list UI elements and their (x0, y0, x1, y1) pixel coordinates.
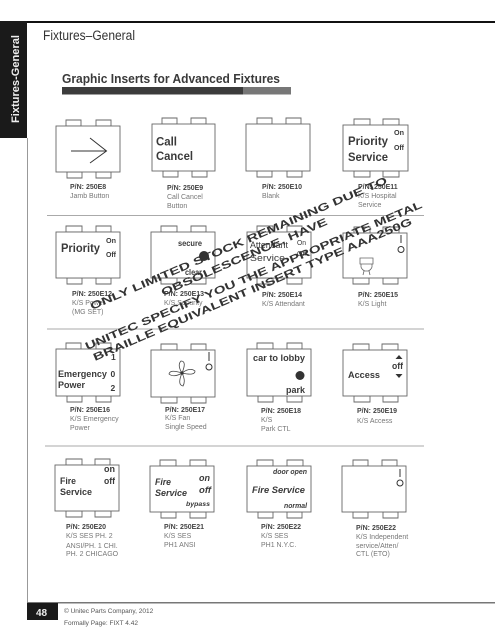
label: 250E11: Service (358, 202, 381, 209)
label: 250E17: Single Speed (165, 424, 207, 431)
label: 250E17 (165, 407, 207, 431)
footer text: Formally Page: FIXT 4.42 (64, 620, 138, 627)
button: emergency power: Power (58, 380, 85, 391)
button: light (343, 227, 407, 284)
button: priority: Priority (61, 241, 100, 255)
page number: 48 (36, 608, 48, 619)
label: 250E22 independent: service/Atten/ (356, 543, 398, 550)
section heading (62, 72, 291, 94)
button: priority service: Priority (348, 134, 388, 148)
label: 250E17: P/N: 250E17 (165, 407, 205, 414)
label: 250E14: K/S Attendant (262, 301, 305, 308)
label: 250E20: ANSI/PH. 1 CHI. (66, 543, 118, 550)
label: 250E9: Button (167, 203, 187, 210)
label: 250E20: P/N: 250E20 (66, 524, 106, 531)
button: priority service: On (394, 128, 404, 137)
button: emergency power (56, 343, 120, 402)
label: 250E22 independent: P/N: 250E22 (356, 525, 396, 532)
button: door open fire service: door open (273, 469, 307, 476)
label: 250E14: P/N: 250E14 (262, 292, 302, 299)
label: 250E16: P/N: 250E16 (70, 407, 110, 414)
label: 250E18 (261, 408, 301, 433)
button: priority: On (106, 236, 116, 245)
button: car to lobby: park (286, 385, 306, 395)
label: 250E21 (164, 524, 204, 549)
button: attendant service: On (297, 240, 306, 247)
button: priority (56, 226, 120, 284)
obsolescence notice overlay: UNITEC SPECIFY YOU THE APPROPRIATE METAL (83, 199, 425, 353)
label: 250E22 fire service (261, 524, 301, 549)
label: 250E11: P/N: 250E11 (358, 184, 398, 191)
button: emergency power: 1 (111, 352, 116, 362)
button: jamb arrow (56, 120, 120, 178)
label: 250E22 independent (356, 525, 408, 558)
button: access: Access (348, 370, 380, 381)
label: 250E21: P/N: 250E21 (164, 524, 204, 531)
label: 250E13: K/S Security (164, 300, 203, 307)
button: car to lobby: car to lobby (253, 353, 305, 363)
obsolescence notice overlay: BRAILLE EQUIVALENT INSERT TYPE AAA250G (91, 216, 414, 364)
button: priority service: Off (394, 143, 404, 152)
label: 250E12 (72, 291, 112, 316)
label: 250E11: K/S Hospital (358, 193, 397, 200)
button: attendant service: Service (250, 253, 285, 264)
page left rule (27, 138, 28, 603)
button: secure: secure (178, 239, 203, 248)
button: car to lobby (247, 343, 311, 402)
button: call cancel: Cancel (156, 149, 193, 163)
obsolescence notice overlay: ONLY LIMITED STOCK REMAINING DUE TO (88, 175, 389, 313)
button: priority service: Service (348, 150, 388, 164)
label: 250E12: K/S Power (72, 300, 106, 307)
label: 250E21: K/S SES (164, 533, 192, 540)
button: secure: clear (185, 268, 202, 277)
button: fire service bypass (150, 460, 214, 518)
label: 250E18: P/N: 250E18 (261, 408, 301, 415)
label: 250E16: K/S Emergency (70, 416, 119, 423)
footer text (64, 607, 154, 627)
label: 250E10: Blank (262, 193, 280, 200)
button: door open fire service (247, 460, 311, 518)
label: 250E21: PH1 ANSI (164, 542, 196, 549)
button: access (343, 344, 407, 402)
button: call cancel: Call (156, 134, 177, 148)
obsolescence notice overlay: OBSOLESCENCE, HAVE (159, 216, 329, 299)
page number (27, 603, 58, 620)
button: fire service: off (104, 476, 116, 486)
button: priority service (343, 119, 408, 177)
label: 250E19: K/S Access (357, 418, 393, 425)
label: 250E19: P/N: 250E19 (357, 408, 397, 415)
label: 250E17: K/S Fan (165, 415, 190, 422)
button: fire service bypass: off (199, 485, 212, 495)
button: fire service: on (104, 464, 115, 474)
label: 250E13 (164, 291, 204, 307)
button: fire service: Fire (60, 476, 76, 487)
label: 250E9: Call Cancel (167, 194, 203, 201)
row separators (45, 215, 424, 446)
button: attendant service (247, 226, 311, 284)
label: 250E15 (358, 292, 398, 308)
button: door open fire service: normal (284, 503, 308, 510)
label: 250E10 (262, 184, 302, 200)
obsolescence notice overlay (83, 175, 425, 364)
label: 250E20 (66, 524, 119, 558)
button: attendant service: Off (297, 251, 306, 258)
label: 250E16: Power (70, 425, 91, 432)
top rule (27, 21, 495, 23)
label: 250E8: P/N: 250E8 (70, 184, 106, 191)
button: secure (151, 226, 215, 284)
label: 250E11 (358, 184, 398, 209)
button: fire service bypass: Service (155, 488, 188, 499)
label: 250E16 (70, 407, 119, 432)
button: emergency power: 2 (110, 383, 116, 393)
label: 250E10: P/N: 250E10 (262, 184, 302, 191)
button: independent service (342, 460, 406, 518)
label: 250E12: (MG SET) (72, 309, 104, 316)
label: 250E12: P/N: 250E12 (72, 291, 112, 298)
label: 250E14 (262, 292, 305, 308)
button: door open fire service: Fire Service (252, 485, 306, 496)
label: 250E22 independent: K/S Independent (356, 534, 408, 541)
label: 250E19 (357, 408, 397, 425)
label: 250E9 (167, 185, 203, 210)
label: 250E18: K/S (261, 417, 273, 424)
button: fire service: Service (60, 487, 92, 498)
label: 250E15: K/S Light (358, 301, 386, 308)
page title: Fixtures–General (43, 28, 135, 43)
button: fire service bypass: on (199, 473, 210, 483)
button: blank (246, 118, 310, 177)
button: fire service (55, 459, 119, 517)
section heading: Graphic Inserts for Advanced Fixtures (62, 72, 280, 86)
button: fire service bypass: bypass (186, 501, 210, 508)
label: 250E20: K/S SES PH. 2 (66, 533, 113, 540)
button: access: off (392, 361, 404, 371)
label: 250E13: P/N: 250E13 (164, 291, 204, 298)
side tab (0, 21, 27, 138)
side tab: Fixtures-General (10, 35, 22, 123)
label: 250E8 (70, 184, 109, 200)
button: fire service bypass: Fire (155, 477, 172, 488)
button: attendant service: Attendant (250, 240, 288, 251)
label: 250E22 fire service: PH1 N.Y.C. (261, 542, 296, 549)
footer rule (27, 602, 495, 604)
footer text: © Unitec Parts Company, 2012 (64, 607, 154, 615)
label: 250E9: P/N: 250E9 (167, 185, 203, 192)
button: call cancel (152, 118, 215, 177)
label: 250E18: Park CTL (261, 426, 291, 433)
button: fan (151, 344, 215, 403)
label: 250E22 fire service: K/S SES (261, 533, 289, 540)
label: 250E8: Jamb Button (70, 193, 109, 200)
label: 250E22 independent: CTL (ETO) (356, 551, 390, 558)
button: emergency power: Emergency (58, 369, 108, 380)
label: 250E22 fire service: P/N: 250E22 (261, 524, 301, 531)
button: emergency power: 0 (110, 369, 116, 379)
button: priority: Off (106, 250, 116, 259)
label: 250E20: PH. 2 CHICAGO (66, 551, 119, 558)
label: 250E15: P/N: 250E15 (358, 292, 398, 299)
